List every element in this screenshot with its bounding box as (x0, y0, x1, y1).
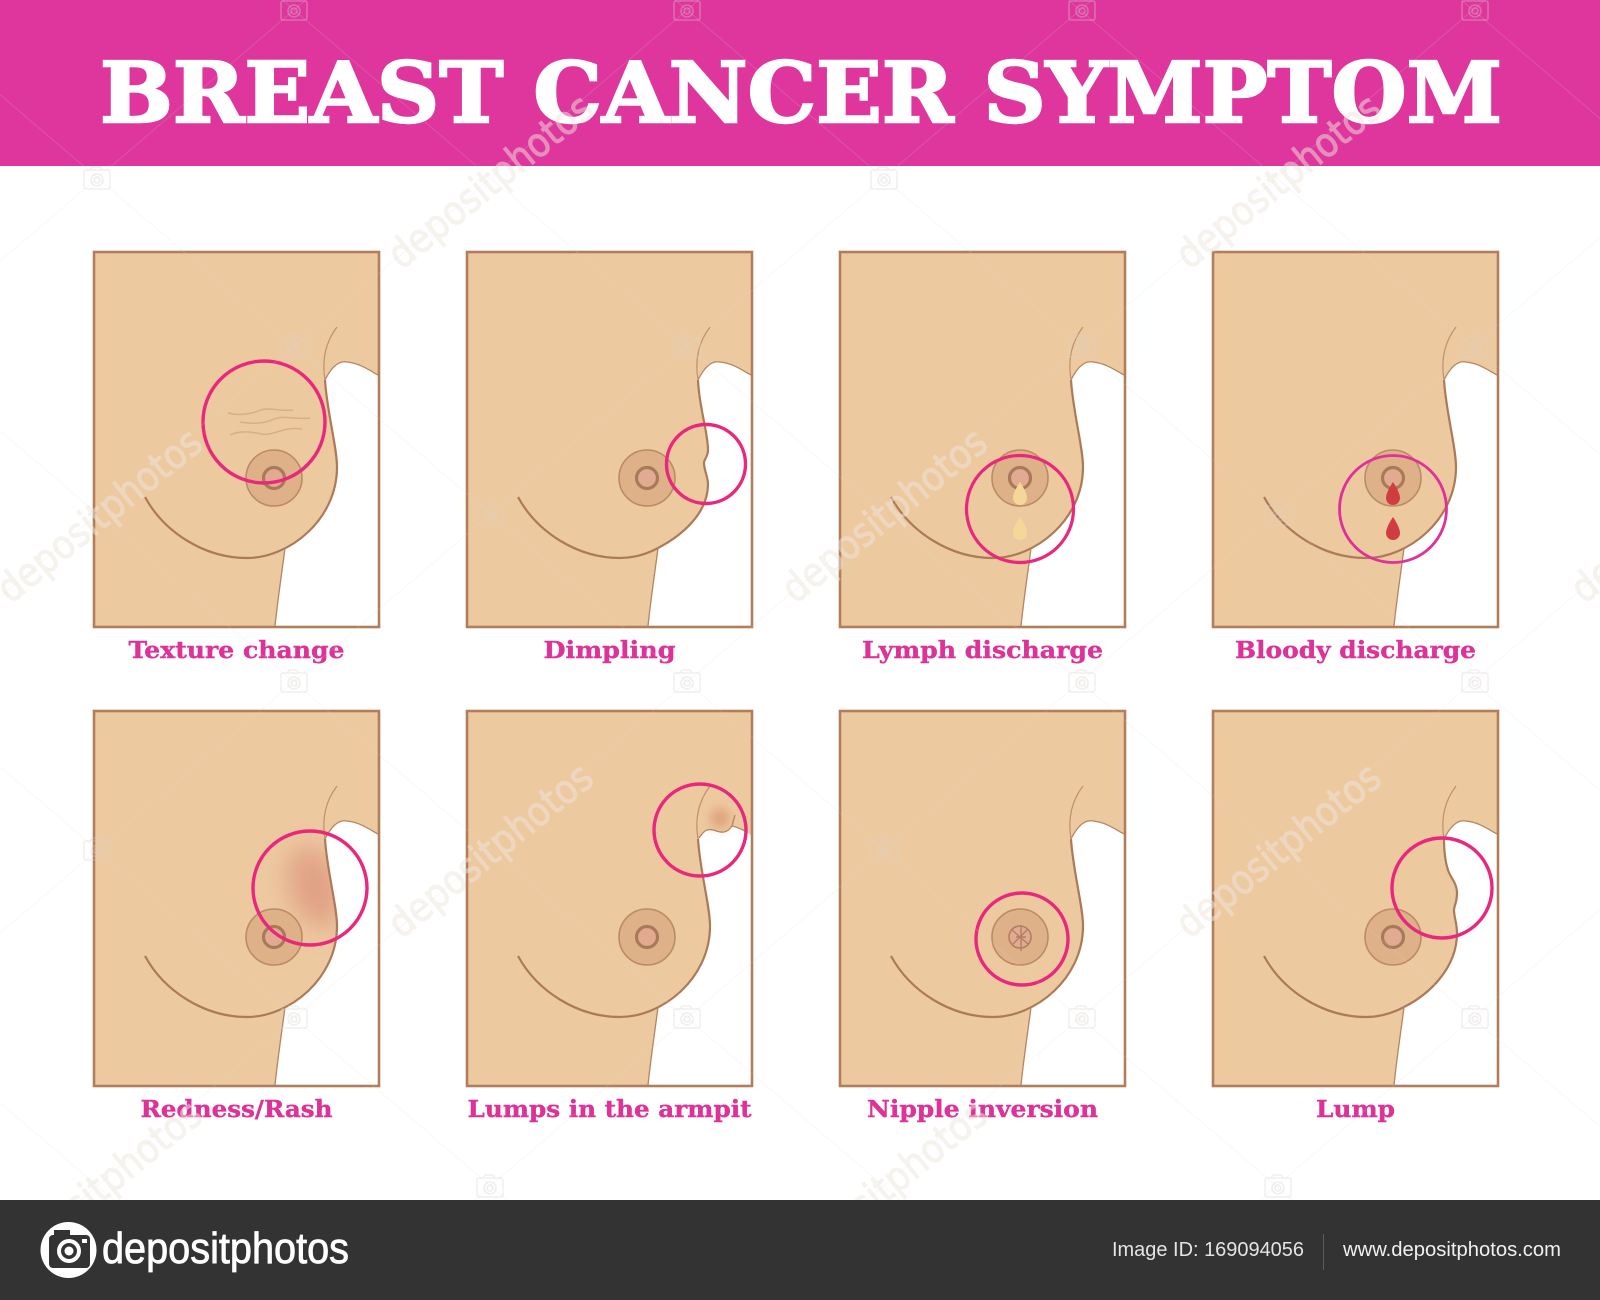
label: lymph discharge: Lymph discharge (862, 636, 1103, 664)
panel: redness/rash (94, 711, 379, 1086)
label: nipple inversion: Nipple inversion (867, 1095, 1098, 1123)
icon: armpit lump (699, 808, 745, 838)
icon: lump outline (1404, 839, 1457, 1007)
website url: www.depositphotos.com (1342, 1239, 1561, 1261)
icon: blood drops (1386, 482, 1400, 540)
watermark overlay: depositphotos (773, 1091, 996, 1284)
panel: bloody discharge (1213, 252, 1498, 627)
highlight circle (1392, 838, 1492, 938)
brand name: depositphotos (102, 1224, 349, 1273)
icon: depositphotos logo (40, 1222, 96, 1278)
watermark overlay: depositphotos (773, 419, 996, 612)
icon: inverted nipple (1009, 925, 1031, 951)
panel: lumps in the armpit (467, 711, 752, 1086)
highlight circle (1340, 456, 1446, 562)
footer bar (0, 1200, 1600, 1300)
panel: dimpling (467, 252, 752, 627)
icon: rash redness (278, 839, 352, 935)
label: redness/rash: Redness/Rash (140, 1095, 332, 1123)
watermark overlay: depositphotos (1167, 85, 1390, 278)
watermark overlay: depositphotos (1167, 754, 1390, 947)
title: BREAST CANCER SYMPTOM (100, 44, 1502, 142)
label: bloody discharge: Bloody discharge (1235, 636, 1476, 664)
title banner (0, 0, 1600, 166)
highlight circle (253, 831, 367, 945)
label: lump: Lump (1316, 1095, 1395, 1123)
highlight circle (966, 456, 1074, 562)
icon: lymph drops (1013, 482, 1027, 540)
label: texture change: Texture change (128, 636, 344, 664)
watermark overlay: depositphotos (379, 85, 602, 278)
panel: lymph discharge (840, 252, 1125, 627)
panel: lump (1213, 711, 1498, 1086)
highlight circle (976, 893, 1068, 985)
icon: skin ripples (228, 409, 310, 435)
panel: nipple inversion (840, 711, 1125, 1086)
icon: dimpled outline (658, 380, 708, 548)
watermark overlay: depositphotos (379, 754, 602, 947)
image id: Image ID: 169094056 (1112, 1239, 1304, 1261)
highlight circle (654, 784, 746, 876)
highlight circle (666, 424, 746, 504)
label: lumps in the armpit: Lumps in the armpit (468, 1095, 752, 1123)
panel: texture change (94, 252, 379, 627)
highlight circle (203, 361, 325, 483)
label: dimpling: Dimpling (544, 636, 676, 664)
